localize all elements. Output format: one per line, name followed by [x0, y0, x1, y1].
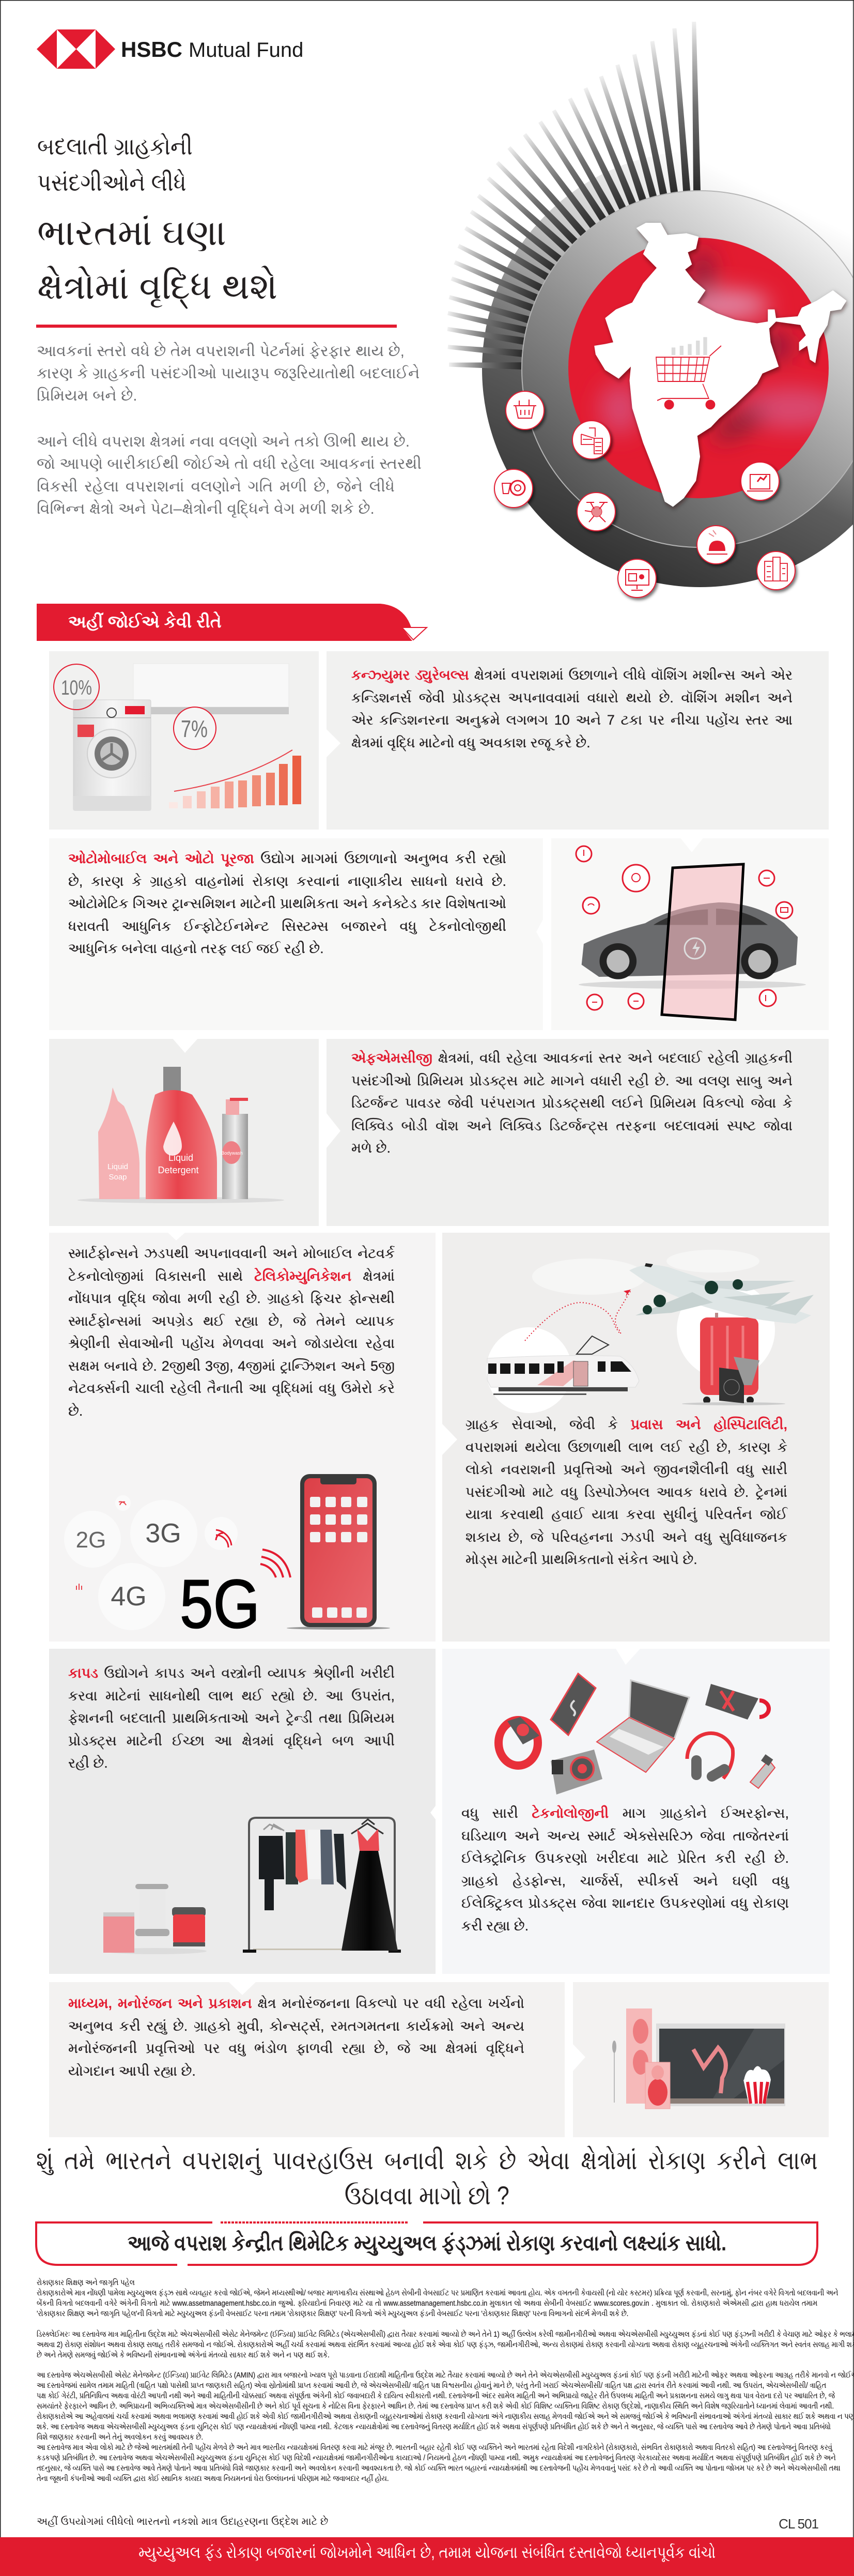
text block: FMCG: પસંદગીઓ પ્રિમિયમ પ્રોડક્ટ્સ માટે માગને વધારી રહી છે. આ વલણ સાબુ અને: [351, 1073, 793, 1088]
icon: television, speakers and popcorn: [612, 2008, 785, 2109]
panel: consumer durables image: 10%: [61, 677, 92, 699]
disclaimer: investor education: રોકાણકારોએ માત્ર નોંધણી પામેલા મ્યુચ્યુઅલ ફંડ્ઝ સાથે વ્યવહાર કરવો જોઈએ, જેમને મધ્યસ્થીઓ/ બજાર માળખાકીય સંસ્થાઓ હેઠળ સેબીની વેબસાઈટ પર પ્રમાણિત કરવામાં આવતા હોય. એક વખતની કેવાયસી (નો યોર કસ્ટમર) પ્રક્રિયા પૂર્ણ કરવાની, સરનામું, ફોન નંબર વગેરે વિગતો બદલવાની અને: [37, 2289, 839, 2297]
disclaimer: purpose of document: છે અને તેમણે સમજવું જોઈએ કે ભવિષ્યની સંભાવનાઓ અંગેનાં મંતવ્યો સાકાર થઈ શકે અને ન પણ થઈ શકે.: [37, 2351, 330, 2359]
text block: intro paragraph two: વિકસી રહેલા વપરાશનાં વલણોને ગતિ મળી છે, જેને લીધે: [37, 478, 395, 495]
callout box outline: [36, 2222, 817, 2265]
text block: travel and hospitality: યાત્રા કરવાથી હવાઈ યાત્રા કરવા સુધીનું પરિવર્તન જોઈ: [465, 1507, 787, 1522]
icon: basket circle: [506, 391, 544, 430]
chart: India consumption hero graphic: [447, 22, 854, 587]
text block: telecommunications: ટેકનોલોજીમાં વિકાસની સાથે ટેલિકોમ્યુનિકેશન ક્ષેત્રમાં: [68, 1268, 395, 1284]
icon: hotel bell circle: [697, 526, 735, 564]
icon: liquid soap and detergent bottles: Liquid: [107, 1162, 128, 1171]
text block: automobiles: છે, કારણ કે ગ્રાહકો વાહનોમાં રોકાણ કરવાનાં નાણાકીય સાધનો ધરાવે છે.: [68, 873, 506, 889]
text block: travel and hospitality: [465, 1416, 788, 1568]
panel: telecommunications: [49, 1233, 436, 1642]
disclaimer: information sources and distribution: તદનુસાર, જે વ્યક્તિ પાસે આ દસ્તાવેજ આવે તેમણે પોતાને આવા પ્રતિબંધો વિશે જાણકાર કરવાની અને અવલોકન કરવાની આવશ્યકતા છે. જો કોઈ વ્યક્તિ ભારત બહારનાં ન્યાયક્ષેત્રમાંથી આ દસ્તાવેજની પહોંચ મેળવવાનું પસંદ કરે છે તો આવી વ્યક્તિ આ પોતાના જોખમ પર કરે છે અને એચએસબીસી તથા: [37, 2464, 841, 2473]
icon: factory circle: [572, 421, 611, 459]
text block: technology: [461, 1805, 789, 1933]
note: map illustrative only: અહીં ઉપયોગમાં લીધેલો ભારતનો નકશો માત્ર ઉદાહરણના ઉદ્દેશ માટે છે: [37, 2516, 328, 2527]
icon: smart gadgets: [499, 1674, 775, 1795]
text block: telecommunications: શ્રેણીની સેવાઓની પહોંચ મેળવવા અને જોડાયેલા રહેવા: [68, 1336, 395, 1351]
text block: technology: ગ્રાહકો હેડફોન્સ, ચાર્જર્સ, સ્પીકર્સ અને ઘણી વધુ: [461, 1873, 789, 1889]
heading: changing customer preferences: પસંદગીઓને લીધે: [37, 169, 187, 196]
icon: laptop circle: [741, 462, 779, 500]
text block: consumer durables: એર કન્ડિશનરના અનુક્રમે લગભગ 10 અને 7 ટકા પર નીચા પહોંચ સ્તર આ: [351, 712, 793, 728]
chart: 2G 3G 4G 5G network bubbles: 5G: [180, 1566, 260, 1643]
text block: telecommunications: નોંધપાત્ર વૃદ્ધિ જોવા મળી રહી છે. ગ્રાહકો ફિચર ફોન્સથી: [68, 1291, 395, 1306]
panel: consumer durables text background: [327, 651, 829, 830]
disclaimer: information sources and distribution: આ દસ્તાવેજ માત્ર એવા લોકો માટે છે જેઓ ભારતમાંથી તેની પહોંચ મેળવે છે અને માત્ર ભારતીય ન્યાયક્ષેત્રમાં વિતરણ કરવા માટે મંજૂર છે. ભારતની બહાર રહેતી કોઈ પણ વ્યક્તિને અને ભારતમાં રહેતા વિદેશી નાગરિકોને (રોકાણકારો, સંભવિત રોકાણકારો અથવા વિતરકો સહિત) આ દસ્તાવેજનું વિતરણ કરવું: [37, 2443, 832, 2452]
text block: travel and hospitality: મોડ્સ માટેની પ્રાથમિકતાનો સંકેત આપે છે.: [465, 1552, 697, 1567]
footer band: [0, 2537, 854, 2576]
chart: 2G 3G 4G 5G network bubbles: [64, 1495, 290, 1643]
text block: intro paragraph two: [37, 432, 422, 518]
text block: travel and hospitality: વપરાશમાં થયેલા ઉછાળાથી લાભ લઈ રહી છે, કારણ કે: [465, 1439, 787, 1454]
disclaimer: information sources and distribution: આ દસ્તાવેજમાં સામેલ તમામ માહિતી (ત્રાહિત પક્ષો પાસેથી પ્રાપ્ત જાણકારી સહિત) એવા સ્રોતોમાંથી પ્રાપ્ત કરવામાં આવી છે, જે એચએસબીસી/ ત્રાહિત પક્ષ વિશ્વસનીય હોવાનું માને છે, પરંતુ તેની ખરાઈ એચએસબીસી/ ત્રાહિત પક્ષ દ્વારા સ્વતંત્ર રીતે કરવામાં આવી નથી. આ ઉપરાંત, એચએસબીસી/ ત્રાહિત: [37, 2381, 826, 2390]
text block: telecommunications: નેટવર્ક્સની ચાલી રહેલી તૈનાતી આ વૃદ્ધિમાં વધુ ઉમેરો કરે: [68, 1381, 395, 1396]
disclaimer: purpose of document: [37, 2329, 854, 2359]
document code: CL 501: [779, 2516, 818, 2532]
text block: FMCG: [351, 1050, 793, 1156]
text block: textiles: કરવા માટેનાં સાધનોથી લાભ થઈ રહ્યો છે. આ ઉપરાંત,: [68, 1688, 395, 1704]
text block: technology: કરી રહ્યા છે.: [461, 1918, 529, 1933]
icon: drums circle: [577, 493, 615, 531]
icon: liquid soap and detergent bottles: [77, 1067, 284, 1203]
panel: technology: [430, 1649, 830, 1974]
icon: liquid soap and detergent bottles: Liquid: [168, 1153, 193, 1163]
icon: liquid soap and detergent bottles: Detergent: [158, 1165, 199, 1175]
banner heading: અહીં જોઈએ કેવી રીતે: [68, 612, 222, 631]
panel: media image: [573, 1982, 829, 2137]
text block: media and entertainment: અનુભવ કરી રહ્યું છે. ગ્રાહકો મુવી, કોન્સર્ટ્સ, રમતગમતના કાર્યક્રમો અને અન્ય: [68, 2018, 524, 2033]
text block: intro paragraph one: પ્રિમિયમ બને છે.: [37, 387, 137, 404]
banner: how to see it: [37, 604, 427, 641]
disclaimer: information sources and distribution: કડકપણે પ્રતિબંધિત છે. આ દસ્તાવેજ અથવા એચએસબીસી મ્યુચ્યુઅલ ફંડના યુનિટ્સ કોઈ પણ વિદેશી ન્યાયક્ષેત્રમાં જામીનગીરીઓના કાયદાઓ / નિયમનો હેઠળ નોંધણી પામ્યા નથી. અમુક ન્યાયક્ષેત્રમાં આ દસ્તાવેજનું વિતરણ ગેરકાયદેસર અથવા મર્યાદિત અથવા સંપૂર્ણપણે પ્રતિબંધિત હોઈ શકે છે અને: [37, 2454, 836, 2462]
icon: red smartphone: [287, 1474, 390, 1630]
text block: FMCG: એફએમસીજી ક્ષેત્રમાં, વધી રહેલા આવકનાં સ્તર અને બદલાઈ રહેલી ગ્રાહકની: [351, 1050, 793, 1066]
icons: connected car features: [576, 846, 793, 1010]
text block: intro paragraph two: વિભિન્ન ક્ષેત્રો અને પેટા–ક્ષેત્રોની વૃદ્ધિને વેગ મળી શકે છે.: [37, 500, 375, 517]
panel: automobile image: [537, 835, 829, 1030]
chart: 2G 3G 4G 5G network bubbles: 3G: [145, 1519, 181, 1548]
icon: HSBC logo hexagon: [37, 29, 115, 69]
text block: textiles: રહી છે.: [68, 1755, 108, 1771]
bar chart: rising orange bars: [169, 750, 301, 808]
text block: intro paragraph one: [37, 342, 420, 404]
text block: travel and hospitality: પસંદગીઓ માટે વધુ ડિસ્પોઝેબલ આવક ધરાવે છે. ટ્રેનમાં: [465, 1484, 787, 1500]
text block: intro paragraph one: કારણ કે ગ્રાહકની પસંદગીઓ પાયારૂપ જરૂરિયાતોથી બદલાઈને: [37, 365, 420, 382]
heading: changing customer preferences: [37, 133, 193, 196]
text block: telecommunications: સ્માર્ટફોન્સમાં અપગ્રેડ થઈ રહ્યા છે, જે તેમને વ્યાપક: [68, 1313, 395, 1328]
title: growth in many sectors in India: ક્ષેત્રોમાં વૃદ્ધિ થશે: [37, 266, 277, 306]
text block: telecommunications: છે.: [68, 1403, 83, 1418]
text block: media and entertainment: યોગદાન આપી રહ્યા છે.: [68, 2063, 196, 2079]
disclaimer: investor education: 'રોકાણકાર શિક્ષણ અને જાગૃતિ પહેલ'ની વિગતો માટે મ્યુચ્યુઅલ ફંડની વેબસાઈટ પરના તમામ 'રોકાણકાર શિક્ષણ' પરની વિગતો અંગે મ્યુચ્યુઅલ ફંડની વેબસાઈટ પરના 'રોકાણકાર શિક્ષણ' પરના વિભાગનો સંદર્ભ મેળવી શકે છે.: [37, 2309, 628, 2318]
text block: consumer durables: ક્ષેત્રમાં વૃદ્ધિ માટેનો વધુ અવકાશ રજૂ કરે છે.: [351, 735, 591, 750]
panel: media text background: [49, 1982, 578, 2137]
text block: technology: ઈલેક્ટ્રોનિક ઉપકરણો ખરીદવા માટે પ્રેરિત કરી રહી છે.: [461, 1850, 789, 1866]
text block: FMCG: મળે છે.: [351, 1140, 391, 1156]
text block: consumer durables: [351, 667, 793, 752]
text block: intro paragraph two: જો આપણે બારીકાઈથી જોઈએ તો વધી રહેલા આવકનાં સ્તરથી: [37, 455, 422, 472]
callout: aim to invest: આજે વપરાશ કેન્દ્રીત થિમેટિક મ્યુચ્યુઅલ ફંડ્ઝમાં રોકાણ કરવાનો લક્ષ્યાંક સાધો.: [128, 2231, 726, 2255]
panel: textiles: [49, 1649, 436, 1974]
disclaimer: information sources and distribution: સમયાંતરે ફેરફારને આધિન છે. અભિપ્રાયની અભિવ્યક્તિઓ માત્ર એચએસબીસીની છે અને કોઈ પૂર્વ સૂચના કે નોટિસ વિના ફેરફારને આધિન છે. તેમાં આ દસ્તાવેજ પ્રાપ્ત કરી શકે એવી કોઈ વિશિષ્ટ વ્યક્તિના વિશિષ્ટ રોકાણ ઉદ્દેશો, નાણાકીય સ્થિતિ અને વિશેષ જરૂરિયાતોને ધ્યાનમાં લેવામાં આવતી નથી.: [37, 2402, 834, 2411]
text block: intro paragraph two: આને લીધે વપરાશ ક્ષેત્રમાં નવા વલણો અને તકો ઊભી થાય છે.: [37, 433, 410, 450]
icon: buildings circle: [757, 551, 795, 590]
disclaimer: information sources and distribution: રોકાણકારોએ આ અહેવાલમાં ચર્ચા કરવામાં અથવા ભલામણ કરવામાં આવી હોઈ શકે એવી કોઈ જામીનગીરીઓ અથવા રોકાણની વ્યૂહરચનાઓમાં રોકાણ કરવાની યોગ્યતા અંગે નાણાકીય સલાહ મેળવવી જોઈએ અને એ સમજવું જોઈએ કે ભવિષ્યની સંભાવનાઓ અંગેનાં મંતવ્યો સાકાર થઈ શકે અથવા ન પણ થઈ: [37, 2412, 854, 2421]
text block: technology: ઘડિયાળ અને અન્ય સ્માર્ટ એક્સેસરિઝ જેવા તાજેતરનાં: [461, 1828, 789, 1843]
text block: automobiles: આધુનિક બનેલા વાહનો તરફ લઈ જઈ રહી છે.: [68, 941, 324, 956]
disclaimer: information sources and distribution: તેના જૂથની કંપનીઓ આવી વ્યક્તિ દ્વારા કોઈ સ્થાનિક કાયદા અથવા નિયમનનાં ઘેરા ઉલ્લંઘનનાં પરિણામ માટે જવાબદાર નહીં હોય.: [37, 2474, 389, 2483]
text block: automobiles: [68, 850, 506, 957]
text block: textiles: પ્રોડક્ટ્સ માટેની ઈચ્છા આ ક્ષેત્રમાં વૃદ્ધિને બળ આપી: [68, 1732, 395, 1748]
chart: 2G 3G 4G 5G network bubbles: 4G: [111, 1582, 147, 1612]
title: growth in many sectors in India: ભારતમાં ઘણા: [37, 212, 226, 253]
text block: textiles: [68, 1665, 395, 1771]
text block: travel and hospitality: શકાય છે, જે પરિવહનના ઝડપી અને વધુ સુવિધાજનક: [465, 1529, 787, 1544]
text block: consumer durables: કન્ઝ્યુમર ડ્યુરેબલ્સ ક્ષેત્રમાં વપરાશમાં ઉછાળાને લીધે વૉશિંગ મશીન્સ અને એર: [351, 667, 793, 683]
text block: FMCG: ડિટર્જન્ટ પાવડર જેવી પરંપરાગત પ્રોડક્ટ્સથી લઈને પ્રિમિયમ વિકલ્પો જેવા કે: [351, 1095, 793, 1111]
disclaimer: information sources and distribution: પક્ષ કોઈ ગેરંટી, પ્રતિનિધિત્વ અથવા વોરંટી આપતી નથી અને આવી માહિતીની ચોક્કસાઈ અથવા સંપૂર્ણતા અંગેની કોઈ જવાબદારી કે દાયિત્વ સ્વીકારતી નથી. દસ્તાવેજની અંદર સામેલ માહિતી અને અભિપ્રાયો જાહેર રીતે ઉપલબ્ધ માહિતી અને પ્રકાશનના સમયે લાગુ થવા પાત્ર વેરાના દરો પર આધારિત છે, જે: [37, 2391, 835, 2400]
panel: FMCG image: [49, 1037, 319, 1226]
text block: media and entertainment: માધ્યમ, મનોરંજન અને પ્રકાશન ક્ષેત્ર મનોરંજનના વિકલ્પો પર વધી રહેલા ખર્ચનો: [68, 1996, 524, 2011]
footer warning text: મ્યુચ્યુઅલ ફંડ રોકાણ બજારનાં જોખમોને આધિન છે, તમામ યોજના સંબંધિત દસ્તાવેજો ધ્યાનપૂર્વક વાંચો: [138, 2543, 716, 2562]
panel: automobile text background: [49, 838, 543, 1030]
disclaimer: information sources and distribution: વિશે જાણકાર કરવાની અને તેનું અવલોકન કરવું આવશ્યક છે.: [37, 2433, 203, 2442]
panel: FMCG text background: [327, 1039, 829, 1226]
text block: intro paragraph one: આવકનાં સ્તરો વધે છે તેમ વપરાશની પેટર્નમાં ફેરફાર થાય છે,: [37, 343, 405, 360]
text block: consumer durables: કન્ડિશનર્સ જેવી પ્રોડક્ટ્સ અપનાવવામાં વધારો થયો છે. વૉશિંગ મશીન અને: [351, 689, 793, 705]
heading: changing customer preferences: બદલાતી ગ્રાહકોની: [37, 133, 193, 160]
heading: investment question: [36, 2146, 818, 2210]
text block: technology: ઈલેક્ટ્રિકલ પ્રોડક્ટ્સ જેવા શાનદાર ઉપકરણોમાં વધુ રોકાણ: [461, 1895, 789, 1911]
icon: engine gears circle: [494, 469, 533, 508]
disclaimer: investor education: રોકાણકાર શિક્ષણ અને જાગૃતિ પહેલ: [37, 2278, 135, 2287]
disclaimer: investor education: [37, 2278, 839, 2318]
text block: media and entertainment: મનોરંજનની પ્રવૃત્તિઓ પર વધુ ભંડોળ ફાળવી રહ્યા છે, જે આ ક્ષેત્રમાં વૃદ્ધિને: [68, 2041, 524, 2056]
text block: automobiles: ઓટોમેટિક ગિઅર ટ્રાન્સમિશન માટેની પ્રાથમિકતા અને કનેક્ટેડ કાર વિશેષતાઓ: [68, 896, 506, 911]
title underline: [36, 325, 397, 328]
text block: textiles: ફેશનની બદલાતી પ્રાથમિકતાઓ અને ટ્રેન્ડી તથા પ્રિમિયમ: [68, 1710, 395, 1726]
disclaimer: purpose of document: અથવા 2) રોકાણ સંશોધન અથવા રોકાણ સલાહ તરીકે સમજવો ન જોઈએ. રોકાણકારોએ અહીં ચર્ચા કરવામાં અથવા સંદર્ભિત કરવામાં આવ્યા હોઈ શકે એવા કોઈ પણ ફંડ્ઝ, જામીનગીરીઓ, અન્ય રોકાણમાં રોકાણ કરવાની યોગ્યતા અથવા રોકાણ વ્યૂહરચનાઓ અંગેની વ્યક્તિગત અને સ્વતંત્ર સલાહ માગી શકે: [37, 2340, 854, 2349]
disclaimer: investor education: બેંકની વિગતો બદલવાની વગેરે અંગેની વિગતો માટે www.assetmanagement.hsbc.co.in જુઓ. ફરિયાદોનાં નિવારણ માટે યા તો www.assetmanagement.hsbc.co.in મુલાકાત લો અથવા સેબીની વેબસાઈટ www.scores.gov.in . મુલાકાત લો. રોકાણકારો એએમસી દ્વારા હાથ ધરાયેલ તમામ: [37, 2299, 817, 2308]
text block: telecommunications: સક્ષમ બનાવે છે. 2જીથી 3જી, 4જીમાં ટ્રાન્ઝિશન અને 5જી: [68, 1358, 395, 1374]
text block: automobiles: ઓટોમોબાઈલ અને ઓટો પૂરજા ઉદ્યોગ માગમાં ઉછાળાનો અનુભવ કરી રહ્યો: [68, 851, 506, 866]
text block: telecommunications: સ્માર્ટફોન્સને ઝડપથી અપનાવવાની અને મોબાઈલ નેટવર્ક: [68, 1246, 395, 1261]
disclaimer: purpose of document: ડિસ્ક્લેઈમરઃ આ દસ્તાવેજ માત્ર માહિતીના ઉદ્દેશ માટે એચએસબીસી એસેટ મેનેજમેન્ટ (ઈન્ડિયા) પ્રાઈવેટ લિમિટેડ (એચએસબીસી) દ્વારા તૈયાર કરવામાં આવ્યો છે અને તેને 1) અહીં ઉલ્લેખ કરેલી જામીનગીરીઓ અથવા એચએસબીસી મ્યુચ્યુઅલ ફંડનાં કોઈ પણ ફંડ્ઝની ખરીદી કે વેચાણ માટે ઓફર કે ભલામણઃ: [37, 2330, 854, 2339]
text block: media and entertainment: [68, 1995, 524, 2079]
text block: FMCG: લિક્વિડ બોડી વૉશ અને લિક્વિડ ડિટર્જન્ટ્સ તરફના બદલાવમાં સ્પષ્ટ જોવા: [351, 1117, 793, 1133]
icon: connected car and phone: [579, 864, 806, 1020]
disclaimer: information sources and distribution: શકે. આ દસ્તાવેજ અથવા એચએસબીસી મ્યુચ્યુઅલ ફંડના યુનિટ્સ કોઈ પણ ન્યાયક્ષેત્રમાં નોંધણી પામ્યા નથી. કેટલાક ન્યાયક્ષેત્રોમાં આ દસ્તાવેજનું વિતરણ મર્યાદિત હોઈ શકે અથવા સંપૂર્ણપણે પ્રતિબંધિત હોઈ શકે છે અને તે અનુસાર, જે વ્યક્તિ પાસે આ દસ્તાવેજ આવે છે તેમણે પોતાને આવા પ્રતિબંધો: [37, 2422, 831, 2431]
text block: automobiles: ધરાવતી આધુનિક ઈન્ફોટેઈનમેન્ટ સિસ્ટમ્સ બજારને વધુ ટેકનોલોજીથી: [68, 918, 506, 933]
logo wordmark: HSBC Mutual Fund: [121, 37, 303, 62]
icon: train, plane and suitcase: [486, 1250, 814, 1413]
panel: consumer durables image: [49, 651, 319, 830]
icon: clothes rack and dress: [243, 1818, 401, 1953]
icon: desktop monitor circle: [618, 559, 656, 597]
chart: 2G 3G 4G 5G network bubbles: 2G: [76, 1527, 106, 1553]
heading: investment question: શું તમે ભારતને વપરાશનું પાવરહાઉસ બનાવી શકે છે એવા ક્ષેત્રોમાં રોકાણ કરીને લાભ: [36, 2146, 818, 2175]
disclaimer: information sources and distribution: આ દસ્તાવેજ એચએસબીસી એસેટ મેનેજમેન્ટ (ઈન્ડિયા) પ્રાઈવેટ લિમિટેડ (AMIN) દ્વારા માત્ર બજારનો ખ્યાલ પૂરો પાડવાના ઈરાદાથી માહિતીના ઉદ્દેશ માટે તૈયાર કરવામાં આવ્યો છે અને તેને એચએસબીસી મ્યુચ્યુઅલ ફંડનાં કોઈ પણ ફંડની ખરીદી માટેની ઓફર અથવા ઓફરના આગ્રહ તરીકે માનવો ન જોઈએ.: [37, 2371, 854, 2380]
text block: travel and hospitality: લોકો નવરાશની પ્રવૃત્તિઓ અને જીવનશૈલીની વધુ સારી: [465, 1462, 787, 1477]
text block: technology: વધુ સારી ટેકનોલોજીની માગ ગ્રાહકોને ઈઅરફોન્સ,: [461, 1805, 789, 1821]
panel: consumer durables image: 7%: [181, 715, 208, 742]
panel: travel and hospitality: [442, 1233, 830, 1642]
text block: telecommunications: [68, 1245, 395, 1418]
icon: liquid soap and detergent bottles: Bodywash: [221, 1151, 243, 1156]
icon: India map with shopping cart: [594, 223, 846, 507]
disclaimer: information sources and distribution: [37, 2370, 854, 2483]
title: growth in many sectors in India: [37, 212, 277, 309]
heading: investment question: ઉઠાવવા માગો છો ?: [345, 2181, 509, 2210]
text block: textiles: કાપડ ઉદ્યોગને કાપડ અને વસ્ત્રોની વ્યાપક શ્રેણીની ખરીદી: [68, 1665, 395, 1681]
text block: travel and hospitality: ગ્રાહક સેવાઓ, જેવી કે પ્રવાસ અને હોસ્પિટાલિટી,: [465, 1417, 787, 1432]
icon: thread spools: [103, 1884, 207, 1954]
icon: liquid soap and detergent bottles: Soap: [108, 1173, 127, 1182]
